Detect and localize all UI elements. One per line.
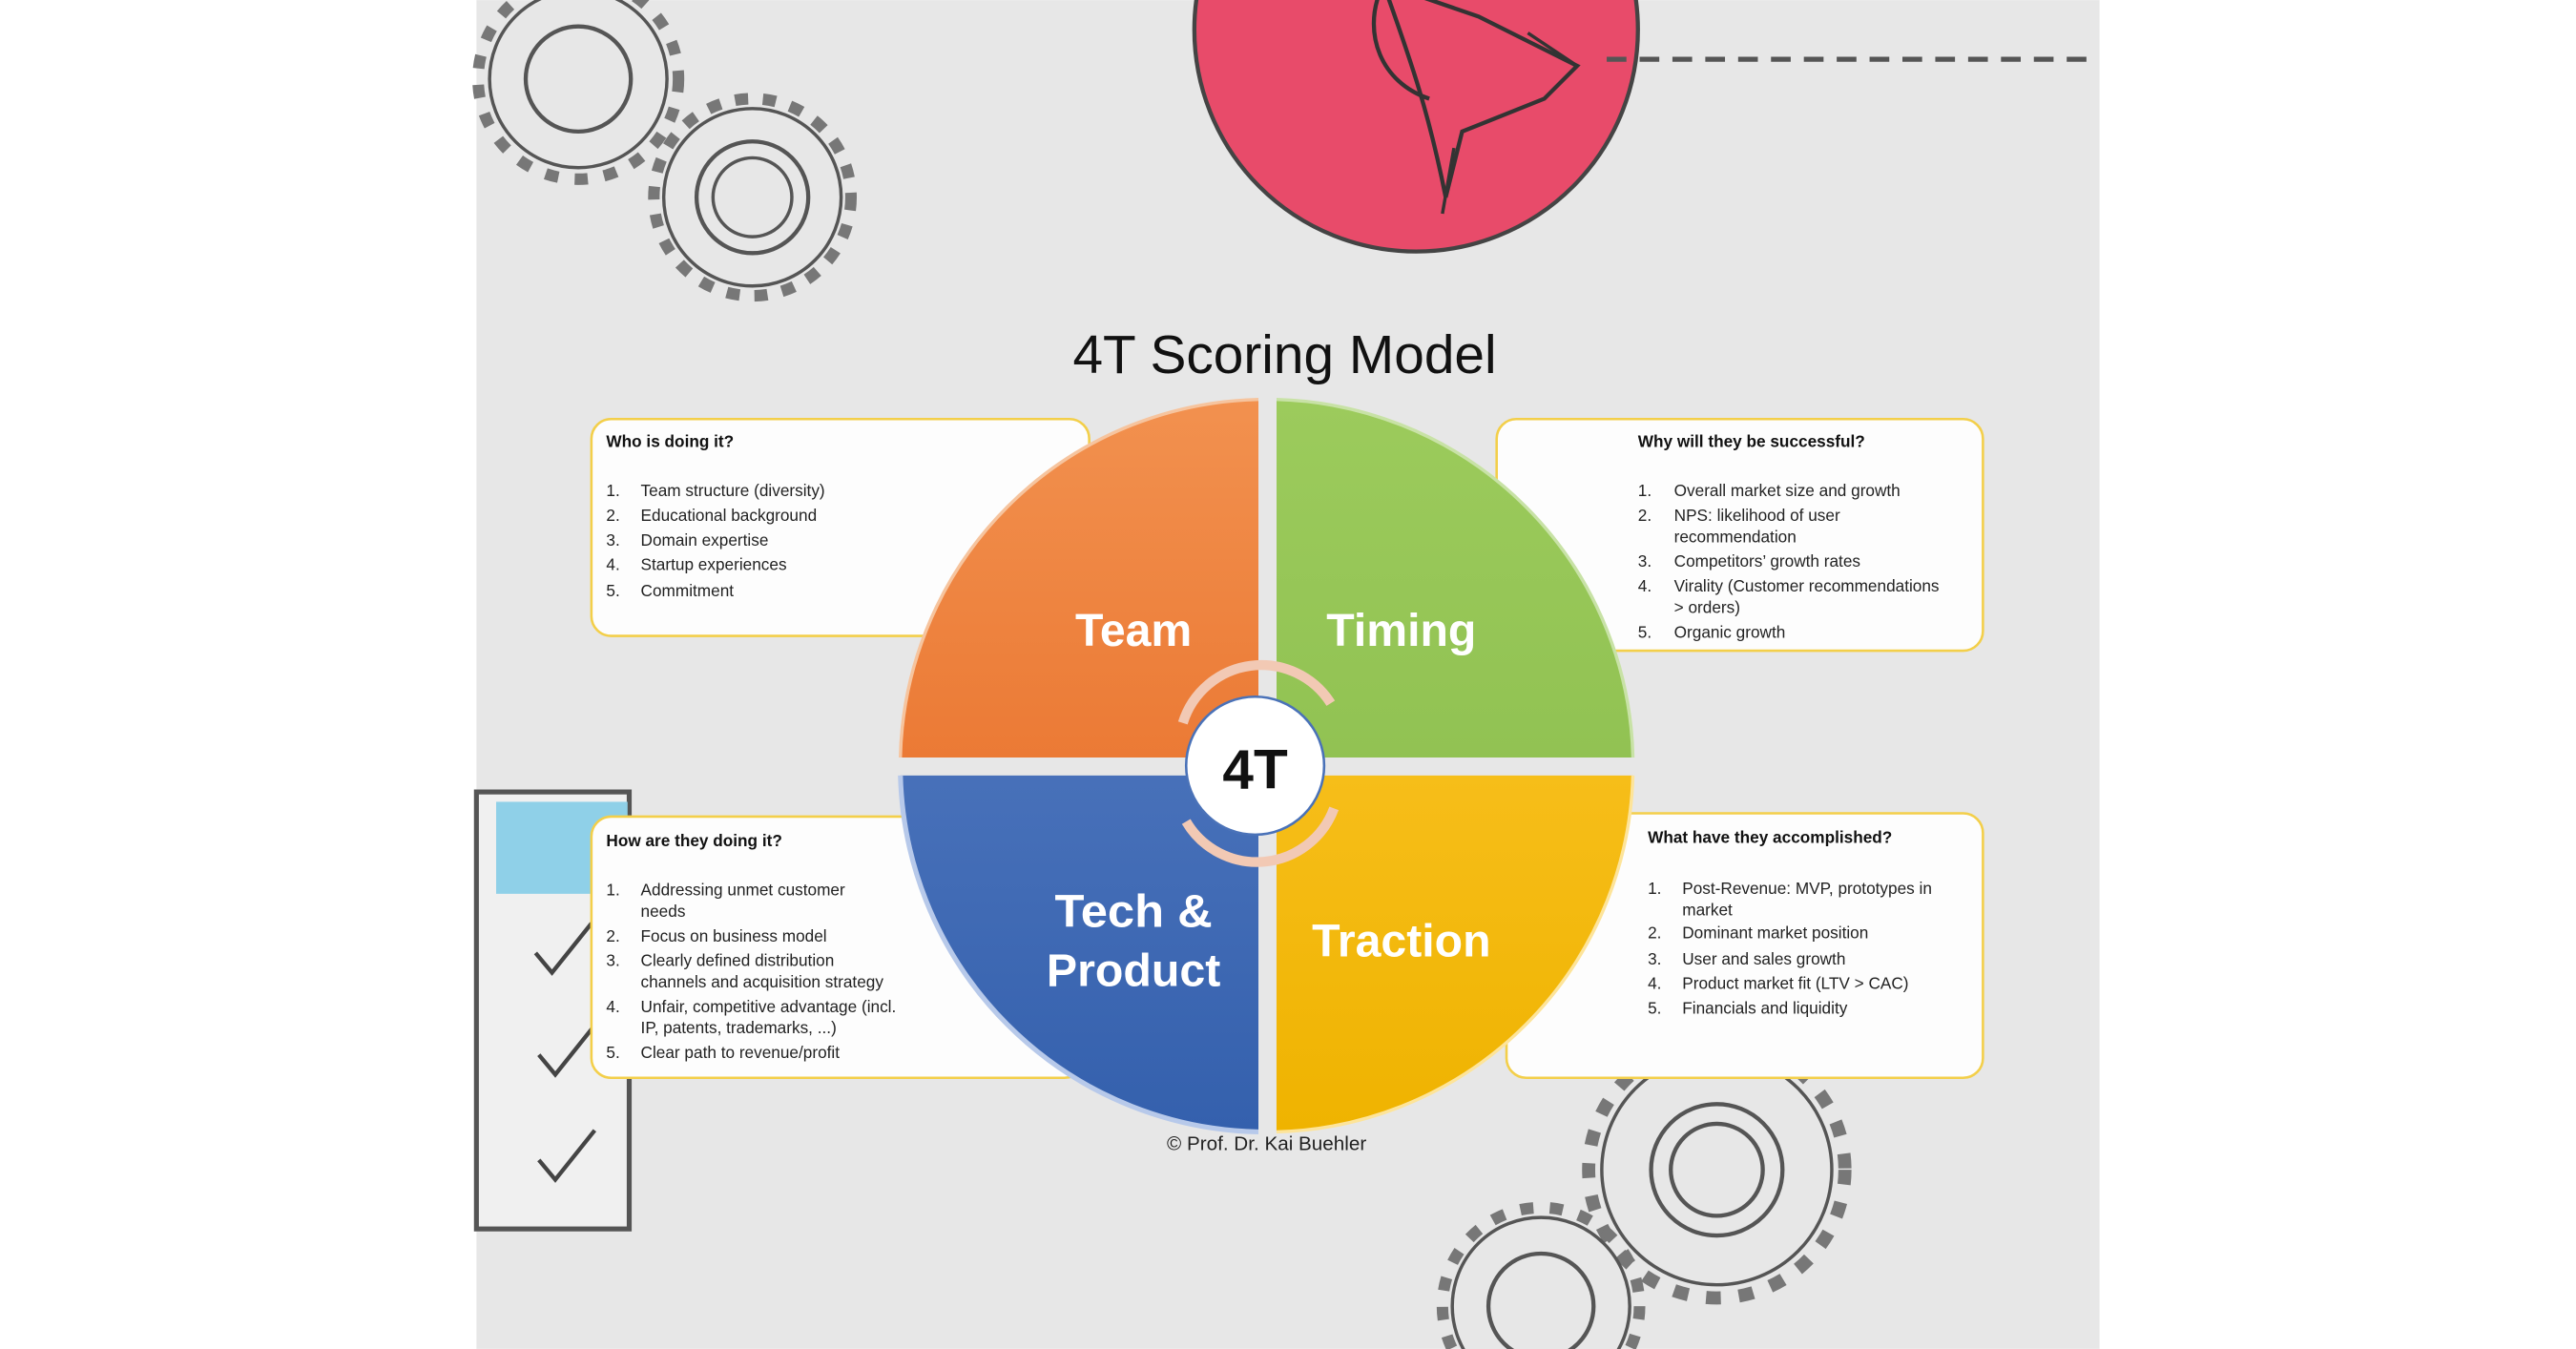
panel: what have they accomplished: 4. (1648, 974, 1661, 993)
quadrant: tech & product: Tech & (1054, 885, 1213, 937)
panel: how are they doing it: How are they doing it? (606, 831, 782, 850)
panel: who is doing it: 3. (606, 530, 620, 550)
panel: how are they doing it: 1. (606, 881, 620, 900)
panel: why will they be successful: Competitors’ growth rates (1674, 551, 1860, 571)
panel: what have they accomplished: Financials and liquidity (1682, 999, 1848, 1018)
panel: how are they doing it: 2. (606, 926, 620, 945)
panel: what have they accomplished: Product market fit (LTV > CAC) (1682, 974, 1909, 993)
panel: who is doing it: Who is doing it? (606, 432, 734, 451)
panel: how are they doing it: Clearly defined distribution (641, 951, 834, 970)
panel: why will they be successful: > orders) (1674, 597, 1740, 616)
panel: what have they accomplished: Post-Revenue: MVP, prototypes in (1682, 879, 1932, 898)
panel: why will they be successful: Organic growth (1674, 622, 1785, 641)
quadrant: traction: Traction (1312, 915, 1491, 966)
title: 4T Scoring Model (1072, 325, 1497, 385)
panel: what have they accomplished: 2. (1648, 923, 1661, 942)
panel: how are they doing it: Clear path to revenue/profit (641, 1043, 840, 1062)
panel: what have they accomplished: market (1682, 900, 1733, 919)
panel: what have they accomplished: Dominant market position (1682, 923, 1868, 942)
quadrant: tech & product (898, 660, 1634, 1134)
panel: who is doing it: 2. (606, 506, 620, 525)
quadrant: tech & product: Product (1047, 944, 1220, 996)
copyright: © Prof. Dr. Kai Buehler (1167, 1133, 1366, 1155)
panel: how are they doing it: IP, patents, trademarks, ...) (641, 1018, 837, 1037)
panel: who is doing it: Domain expertise (641, 530, 768, 550)
panel: who is doing it: 4. (606, 555, 620, 574)
panel: how are they doing it: 4. (606, 997, 620, 1016)
panel: how are they doing it: Unfair, competitive advantage (incl. (641, 997, 896, 1016)
panel: what have they accomplished: User and sales growth (1682, 949, 1845, 968)
dashed line (1607, 58, 2100, 61)
panel: why will they be successful: NPS: likelihood of user (1674, 506, 1840, 525)
panel: what have they accomplished: 1. (1648, 879, 1661, 898)
panel: how are they doing it: channels and acquisition strategy (641, 972, 883, 991)
panel: how are they doing it: 5. (606, 1043, 620, 1062)
icon: checklist (476, 792, 630, 1229)
icon: gears bottom-right (1443, 1042, 1845, 1349)
panel: who is doing it: Educational background (641, 506, 817, 525)
panel: why will they be successful: Virality (Customer recommendations (1674, 576, 1940, 595)
center 4T badge: 4T (1222, 739, 1288, 801)
background panel (476, 0, 2100, 1349)
panel: who is doing it: Startup experiences (641, 555, 787, 574)
quadrant: timing: Timing (1326, 605, 1476, 656)
quadrant: team: Team (1075, 605, 1192, 656)
panel: what have they accomplished: 3. (1648, 949, 1661, 968)
panel: why will they be successful (1497, 419, 1983, 651)
panel: why will they be successful: Why will they be successful? (1638, 432, 1865, 451)
icon: gears top-left (478, 0, 851, 296)
panel: how are they doing it: Addressing unmet customer (641, 881, 845, 900)
panel: how are they doing it: Focus on business model (641, 926, 827, 945)
panel: why will they be successful: 2. (1638, 506, 1652, 525)
panel: who is doing it (592, 419, 1090, 636)
panel: why will they be successful: 5. (1638, 622, 1652, 641)
panel: how are they doing it: 3. (606, 951, 620, 970)
panel: what have they accomplished: What have they accomplished? (1648, 827, 1892, 846)
center 4T badge (1186, 696, 1324, 835)
quadrant: timing (1183, 398, 1635, 1133)
panel: how are they doing it (592, 817, 1084, 1078)
icon: rocket circle (1195, 0, 1638, 252)
panel: who is doing it: Commitment (641, 581, 734, 600)
panel: why will they be successful: 3. (1638, 551, 1652, 571)
panel: how are they doing it: needs (641, 902, 685, 921)
panel: who is doing it: Team structure (diversity) (641, 481, 825, 500)
panel: who is doing it: 1. (606, 481, 620, 500)
panel: why will they be successful: Overall market size and growth (1674, 481, 1901, 500)
panel: why will they be successful: 1. (1638, 481, 1652, 500)
quadrant: traction (1277, 775, 1635, 1133)
panel: why will they be successful: 4. (1638, 576, 1652, 595)
panel: what have they accomplished: 5. (1648, 999, 1661, 1018)
chart: 4T circle (901, 400, 1633, 1132)
panel: what have they accomplished (1506, 814, 1983, 1078)
icon: cycle arrows (1183, 665, 1334, 862)
quadrant: team (901, 400, 1633, 1132)
panel: who is doing it: 5. (606, 581, 620, 600)
panel: why will they be successful: recommendation (1674, 527, 1797, 546)
